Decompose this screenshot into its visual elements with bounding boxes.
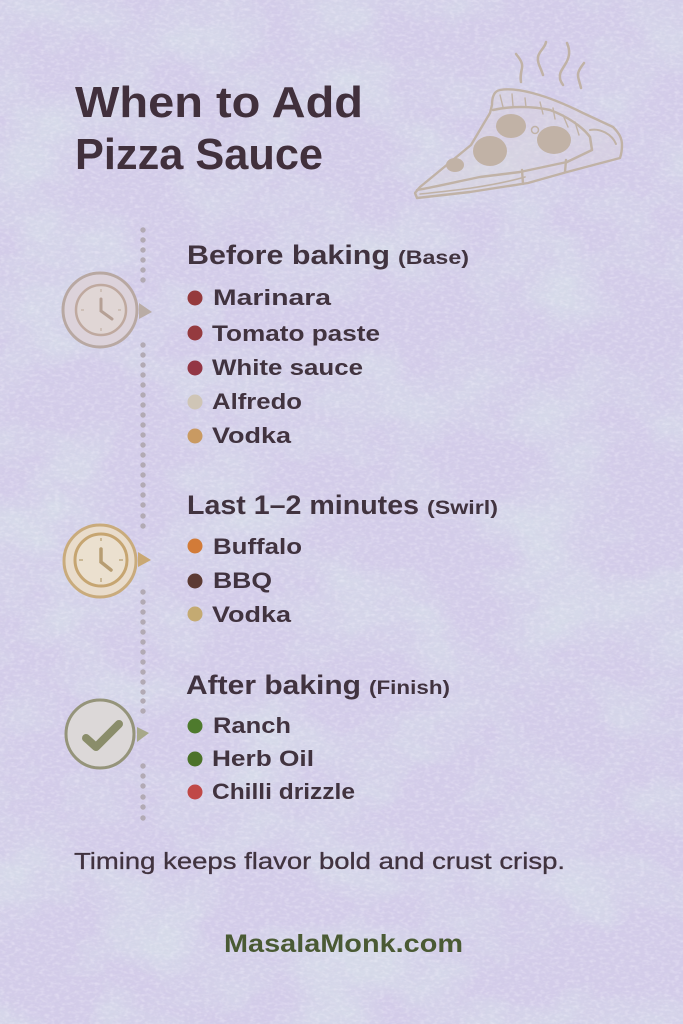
title: When to Add <box>75 78 363 127</box>
closing note: Timing keeps flavor bold and crust crisp. <box>74 848 565 874</box>
icon: check mark, after baking <box>66 700 149 768</box>
icon: slice body <box>415 89 622 198</box>
list items <box>188 534 302 627</box>
list items: Alfredo <box>212 389 302 414</box>
icon: clock, before baking <box>63 273 152 347</box>
list items <box>188 285 380 448</box>
list items <box>188 713 355 804</box>
icon: clock, last minutes <box>64 525 151 597</box>
icon: pizza slice with steam <box>415 42 622 198</box>
title: Pizza Sauce <box>75 130 323 179</box>
list items: BBQ <box>213 568 272 593</box>
title <box>75 78 363 179</box>
list items: Chilli drizzle <box>212 779 355 804</box>
list items: Herb Oil <box>212 746 314 771</box>
list items: Tomato paste <box>212 321 380 346</box>
section: before baking <box>187 240 469 448</box>
section: after baking <box>186 670 450 804</box>
footer: website: MasalaMonk.com <box>224 930 463 958</box>
list items: White sauce <box>212 355 363 380</box>
list items: Marinara <box>213 285 332 310</box>
heading: After baking (Finish) <box>186 670 450 700</box>
list items: Vodka <box>212 602 292 627</box>
heading: Before baking (Base) <box>187 240 469 270</box>
heading: Last 1–2 minutes (Swirl) <box>187 490 498 520</box>
timeline: dotted vertical line <box>140 227 146 821</box>
icon: steam <box>516 42 584 88</box>
list items: Ranch <box>213 713 291 738</box>
list items: Buffalo <box>213 534 302 559</box>
section: last 1-2 minutes <box>187 490 498 627</box>
list items: Vodka <box>212 423 292 448</box>
